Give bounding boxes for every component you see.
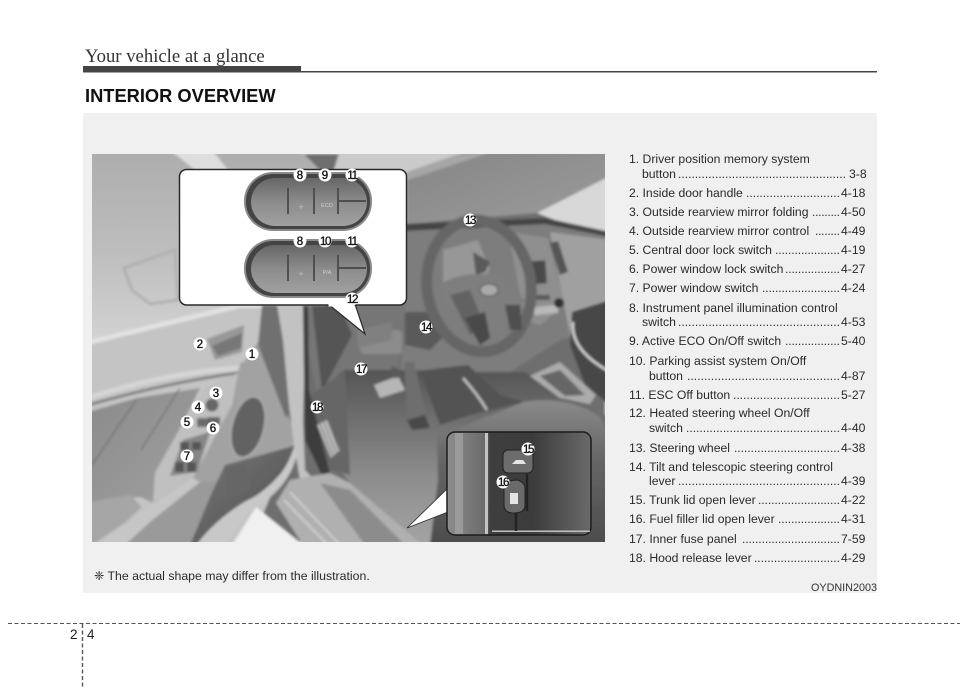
parts list: 5-40 <box>841 334 866 348</box>
parts list: 14. Tilt and telescopic steering control <box>629 460 833 474</box>
parts list: 16. Fuel filler lid open lever <box>629 512 775 526</box>
image code: OYDNIN2003 <box>811 582 877 594</box>
parts list: .............................. <box>742 532 840 546</box>
number badges on the illustration: 14 <box>421 322 433 334</box>
parts list: 4-49 <box>841 224 866 238</box>
note: ❈ The actual shape may differ from the illustration. <box>94 569 370 583</box>
window trim <box>88 368 238 398</box>
parts list: 4-50 <box>841 205 866 219</box>
door upper panel <box>92 306 278 542</box>
door surface around speaker <box>193 342 300 490</box>
parts list: 1. Driver position memory system <box>629 152 810 166</box>
inset box <box>447 432 591 535</box>
parts list: 3-8 <box>849 167 867 181</box>
parts list: 4-27 <box>841 262 866 276</box>
parts list: 2. Inside door handle <box>629 186 743 200</box>
parts list: ................................................ <box>678 474 840 488</box>
parts list: 12. Heated steering wheel On/Off <box>629 406 810 420</box>
parts list: 7. Power window switch <box>629 281 758 295</box>
parts list: 8. Instrument panel illumination control <box>629 301 838 315</box>
window switches <box>170 432 210 476</box>
number badges on the illustration: 7 <box>184 451 190 463</box>
floor sill <box>276 473 423 545</box>
callout pointer <box>328 304 365 334</box>
gear console <box>530 362 596 404</box>
parts list: 11. ESC Off button <box>629 388 730 402</box>
parts list: 5-27 <box>841 388 866 402</box>
switch bank bottom: parking assist: P/A <box>323 270 332 276</box>
number badges on the illustration: 5 <box>184 417 190 429</box>
section heading: INTERIOR OVERVIEW <box>85 85 276 106</box>
switch bank top: ECO: ECO <box>321 203 334 209</box>
callout: switch bank inset <box>180 170 406 334</box>
parts list: 5. Central door lock switch <box>629 243 772 257</box>
upper left exterior <box>88 150 330 340</box>
parts list: 4-87 <box>841 369 866 383</box>
parts list: 4-31 <box>841 512 866 526</box>
parts list: 18. Hood release lever <box>629 551 752 565</box>
inset pointer <box>407 488 448 528</box>
number badges on the illustration: 11 <box>347 170 358 182</box>
parts list: ................................ <box>734 441 840 455</box>
parts list: .............................................. <box>686 421 840 435</box>
parts list: 3. Outside rearview mirror folding <box>629 205 808 219</box>
switch bank bottom: parking assist: + <box>298 269 304 279</box>
number badges on the illustration: 9 <box>322 170 328 182</box>
door mirror ghost <box>124 250 178 304</box>
cluster <box>443 240 490 285</box>
column switch bank <box>361 324 392 346</box>
parts list: ................. <box>785 262 840 276</box>
panel: interior overview background <box>83 113 877 593</box>
parts list: switch <box>642 315 676 329</box>
number badges on the illustration: 17 <box>356 364 367 376</box>
parts list: .......................... <box>754 551 840 565</box>
trunk lever <box>503 450 533 473</box>
callout box <box>180 170 406 305</box>
switch panel <box>234 373 238 377</box>
seat <box>430 400 610 545</box>
parts list: 4-53 <box>841 315 866 329</box>
parts list: .................................................. <box>678 167 846 181</box>
hood release lever area <box>315 374 350 476</box>
footwell floor <box>341 369 605 542</box>
number badges on the illustration: 8 <box>297 170 303 182</box>
parts list: ......... <box>812 205 840 219</box>
number badges on the illustration: 8 <box>297 236 303 248</box>
steering wheel <box>418 213 540 359</box>
parts list: 4-19 <box>841 243 866 257</box>
parts list: ................................ <box>733 388 840 402</box>
number badges on the illustration: 3 <box>213 388 219 400</box>
page number: 4 <box>87 627 95 642</box>
parts list: 6. Power window lock switch <box>629 262 783 276</box>
door pocket <box>190 445 296 545</box>
number badges on the illustration: 10 <box>320 236 331 248</box>
photo: car interior illustration <box>88 150 610 545</box>
number badges on the illustration: 11 <box>347 236 358 248</box>
page number <box>70 627 95 642</box>
page number: 2 <box>70 627 78 642</box>
below callout dark column <box>306 306 315 322</box>
parts list: ................................................ <box>678 315 840 329</box>
number badges on the illustration <box>180 168 534 489</box>
switch bank top: ECO <box>244 172 372 231</box>
number badges on the illustration: 2 <box>197 339 203 351</box>
parts list: 17. Inner fuse panel <box>629 532 737 546</box>
pedal <box>374 376 405 398</box>
parts list: 13. Steering wheel <box>629 441 730 455</box>
parts list: .................... <box>775 243 840 257</box>
parts list: 4-29 <box>841 551 866 565</box>
number badges on the illustration: 16 <box>498 477 509 489</box>
switch bank bottom: parking assist <box>244 239 372 298</box>
fuel lever <box>504 480 525 513</box>
page header title: Your vehicle at a glance <box>85 46 265 67</box>
centre stack <box>511 234 562 324</box>
parts list: 4-22 <box>841 493 866 507</box>
header rule <box>83 66 877 72</box>
number badges on the illustration: 13 <box>465 215 476 227</box>
parts list: ........................ <box>762 281 840 295</box>
parts list: 4-39 <box>841 474 866 488</box>
number badges on the illustration: 15 <box>523 444 534 456</box>
white gap under door <box>232 506 300 542</box>
parts list: 7-59 <box>841 532 866 546</box>
number badges on the illustration: 6 <box>210 423 216 435</box>
A-pillar and door edge <box>258 305 290 418</box>
parts list: ................... <box>778 512 840 526</box>
roof lining <box>310 154 460 307</box>
parts list: 9. Active ECO On/Off switch <box>629 334 781 348</box>
number badges on the illustration: 12 <box>347 294 358 306</box>
parts list: 4-38 <box>841 441 866 455</box>
windshield <box>407 150 610 224</box>
parts list: ............................ <box>746 186 840 200</box>
switch bank top: ECO: + <box>298 202 304 212</box>
number badges on the illustration: 1 <box>249 349 255 361</box>
dashboard <box>400 218 610 372</box>
parts list: 10. Parking assist system On/Off <box>629 354 807 368</box>
parts list: 4-18 <box>841 186 866 200</box>
number badges on the illustration: 4 <box>195 402 202 414</box>
parts list: switch <box>649 421 683 435</box>
armrest and lip <box>92 498 142 542</box>
parts list: ................. <box>785 334 840 348</box>
parts list: 4-24 <box>841 281 866 295</box>
parts list: ......................... <box>758 493 840 507</box>
footer dashed rules <box>8 624 960 689</box>
number badges on the illustration: 18 <box>312 402 323 414</box>
speaker <box>231 397 265 457</box>
parts list: 4-40 <box>841 421 866 435</box>
callout: lever inset <box>407 432 591 535</box>
parts list: button <box>642 167 676 181</box>
parts list: ........ <box>815 224 840 238</box>
parts list: 15. Trunk lid open lever <box>629 493 756 507</box>
parts list: 4. Outside rearview mirror control <box>629 224 809 238</box>
parts list <box>629 152 867 565</box>
parts list: button <box>649 369 683 383</box>
parts list: ............................................. <box>687 369 840 383</box>
inner door handle <box>207 325 244 360</box>
parts list: lever <box>649 474 675 488</box>
